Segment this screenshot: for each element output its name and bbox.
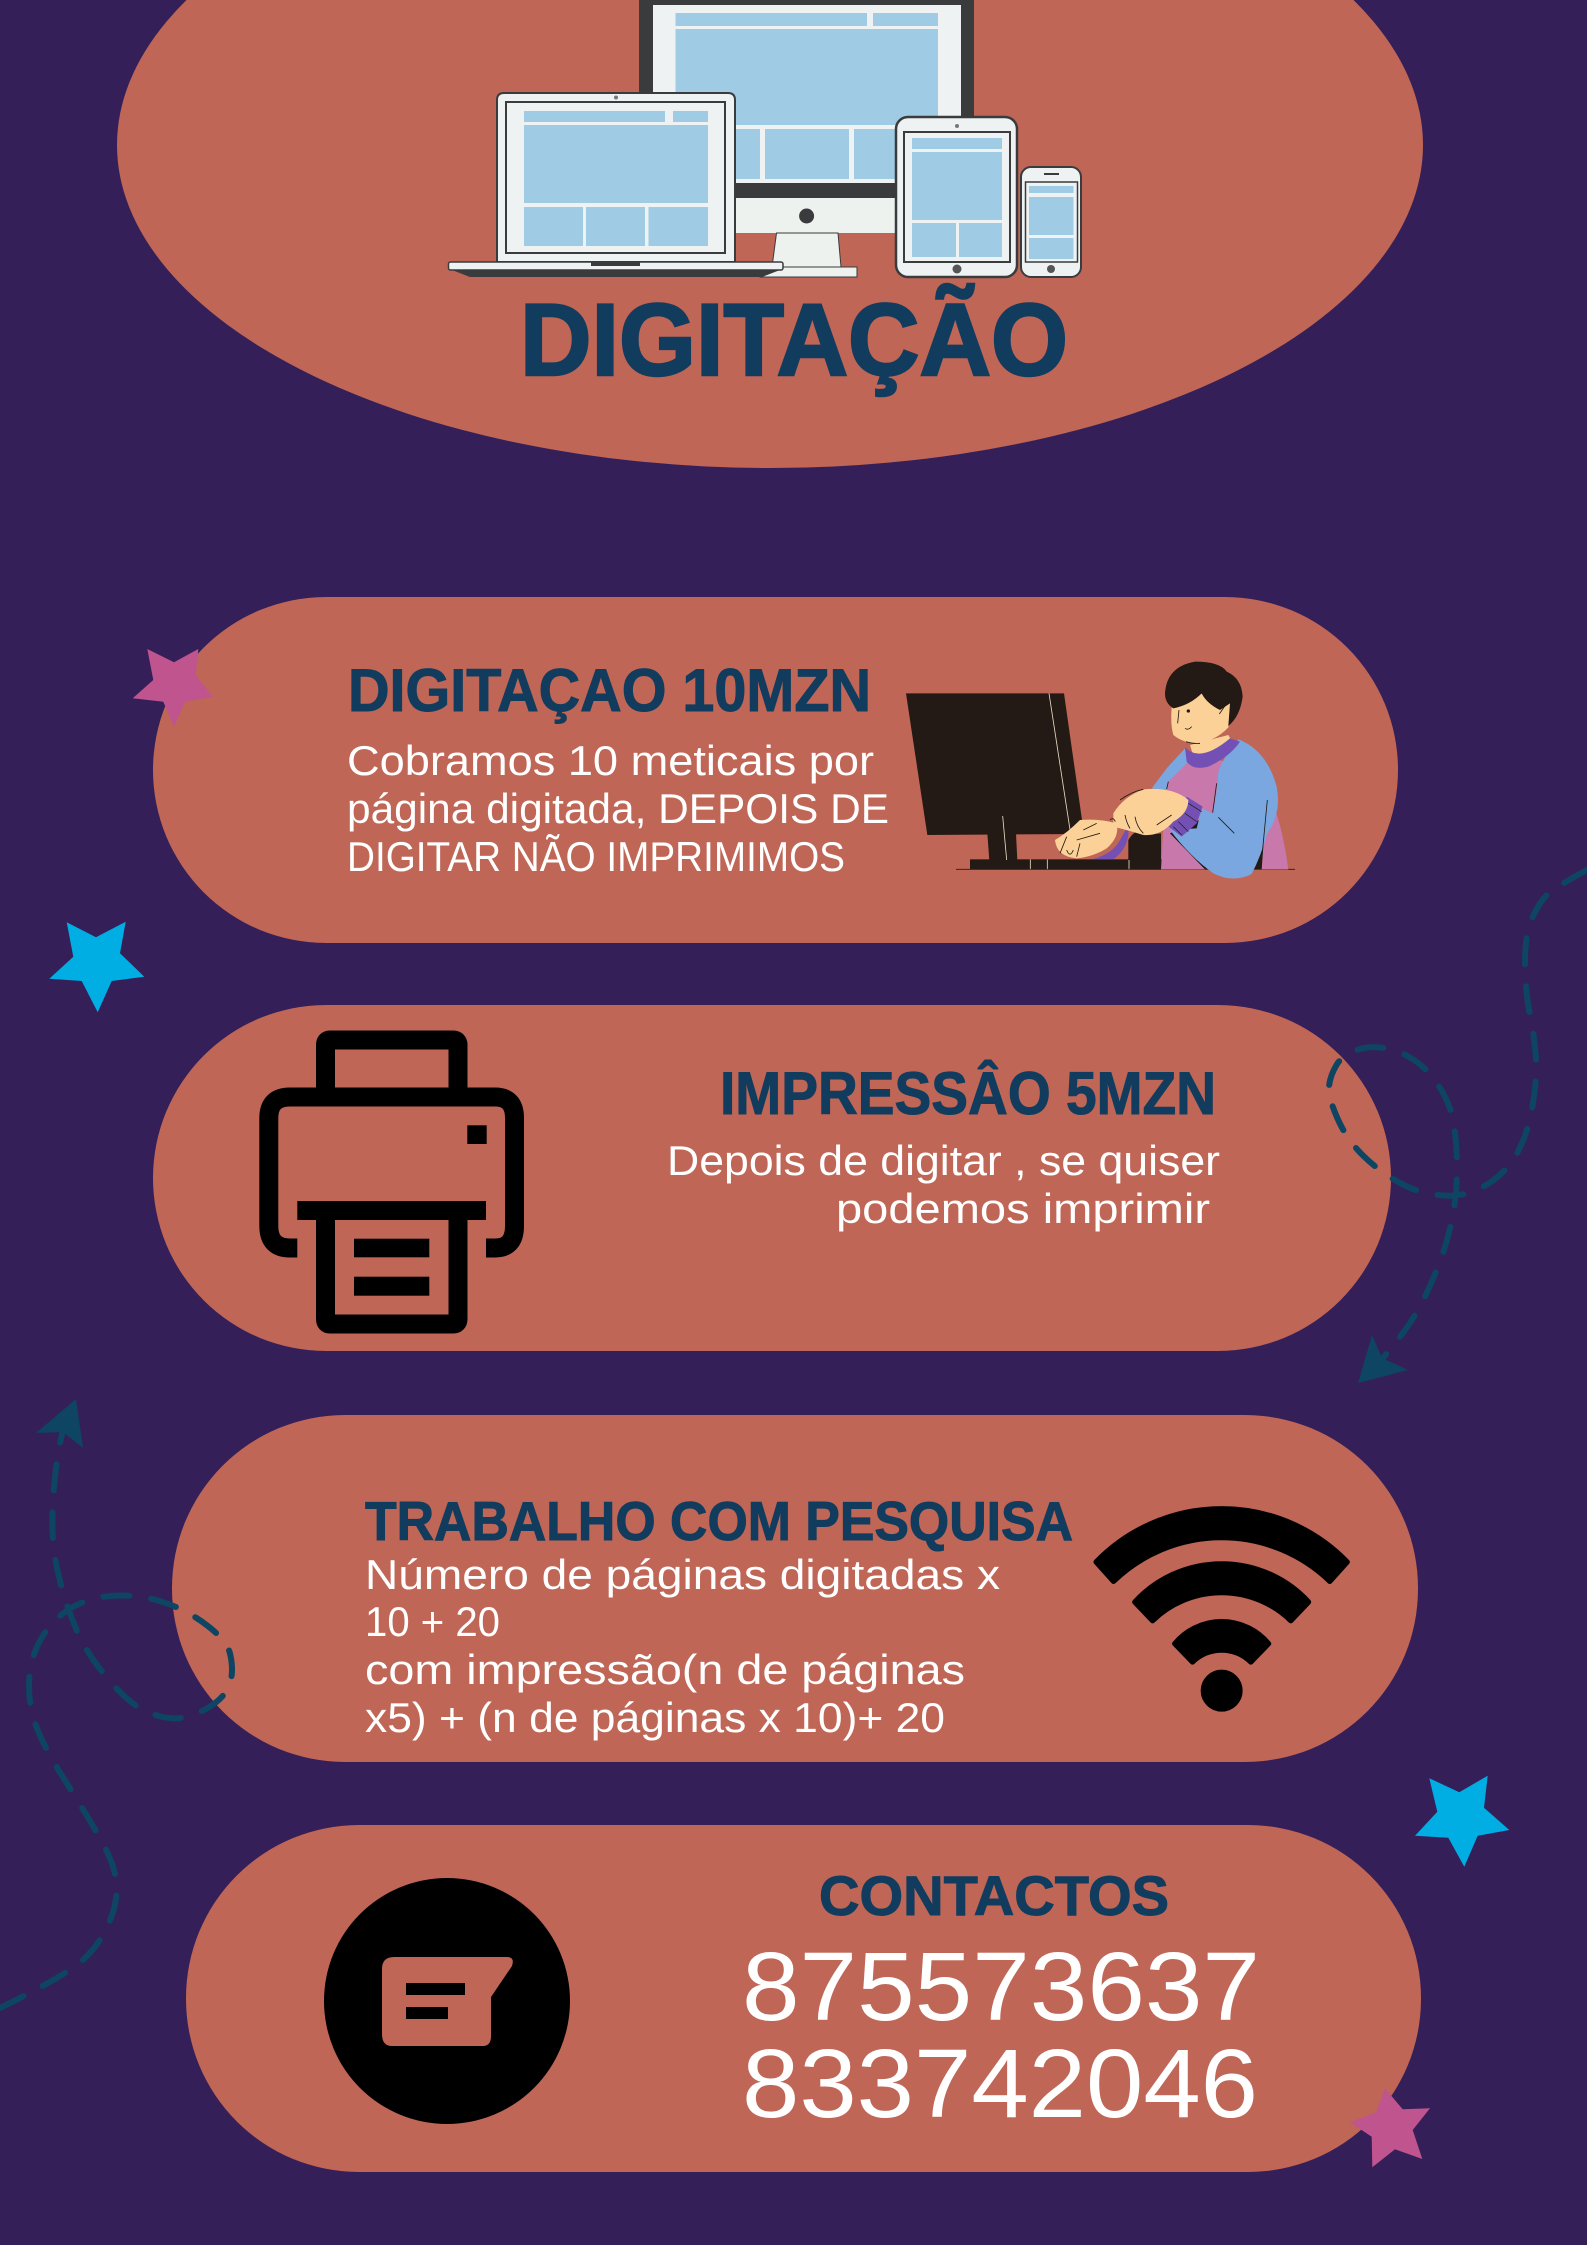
- header ellipse: [117, 0, 1423, 468]
- body text: x5) + (n de páginas x 10)+ 20: [365, 1694, 945, 1741]
- panel content: digitação: [347, 657, 1295, 880]
- body text: Cobramos 10 meticais por: [347, 737, 874, 784]
- panel background: digitação price: [153, 597, 1398, 943]
- phone: [1021, 167, 1081, 277]
- body text: DIGITAR NÃO IMPRIMIMOS: [347, 833, 845, 880]
- body text: podemos imprimir: [836, 1185, 1210, 1232]
- panel content: trabalho com pesquisa: [365, 1490, 1347, 1741]
- star: pink bottom right: [1350, 2088, 1430, 2167]
- body text: [347, 737, 889, 880]
- phone numbers: [742, 1932, 1260, 2138]
- dashed arrow: left side: [0, 1399, 232, 2008]
- body text: Número de páginas digitadas x: [365, 1551, 1000, 1598]
- heading: CONTACTOS: [819, 1864, 1169, 1927]
- computer monitor: [906, 693, 1295, 870]
- laptop: [448, 93, 783, 277]
- body text: 10 + 20: [365, 1598, 500, 1645]
- icon: responsive devices: [448, 0, 1081, 277]
- heading: TRABALHO COM PESQUISA: [365, 1490, 1073, 1552]
- star: pink top left: [133, 649, 213, 727]
- body text: página digitada, DEPOIS DE: [347, 785, 889, 832]
- body text: Depois de digitar , se quiser: [667, 1137, 1220, 1184]
- icon: wifi: [1096, 1509, 1347, 1709]
- dashed arrow: right side: [1329, 870, 1587, 1383]
- icon: printer: [269, 1040, 514, 1324]
- panel content: contactos: [324, 1864, 1260, 2138]
- panel content: impressão: [269, 1040, 1220, 1324]
- panel background: impressão price: [153, 1005, 1391, 1351]
- panel background: contactos: [186, 1825, 1421, 2172]
- body text: [365, 1551, 1000, 1741]
- illustration: person typing at computer: [906, 662, 1295, 879]
- phone numbers: 875573637: [742, 1932, 1260, 2041]
- person: [1055, 662, 1288, 879]
- star: blue right: [1415, 1776, 1509, 1867]
- title: DIGITAÇÃO: [520, 283, 1068, 397]
- heading: DIGITAÇAO 10MZN: [348, 657, 871, 724]
- panel background: trabalho com pesquisa: [172, 1415, 1418, 1762]
- tablet: [896, 117, 1017, 277]
- phone numbers: 833742046: [742, 2029, 1258, 2138]
- desktop monitor: [639, 0, 974, 277]
- body text: [667, 1137, 1220, 1232]
- icon: message bubble: [324, 1878, 570, 2124]
- body text: com impressão(n de páginas: [365, 1646, 965, 1693]
- star: blue left: [49, 922, 144, 1012]
- heading: IMPRESSÂO 5MZN: [720, 1060, 1216, 1127]
